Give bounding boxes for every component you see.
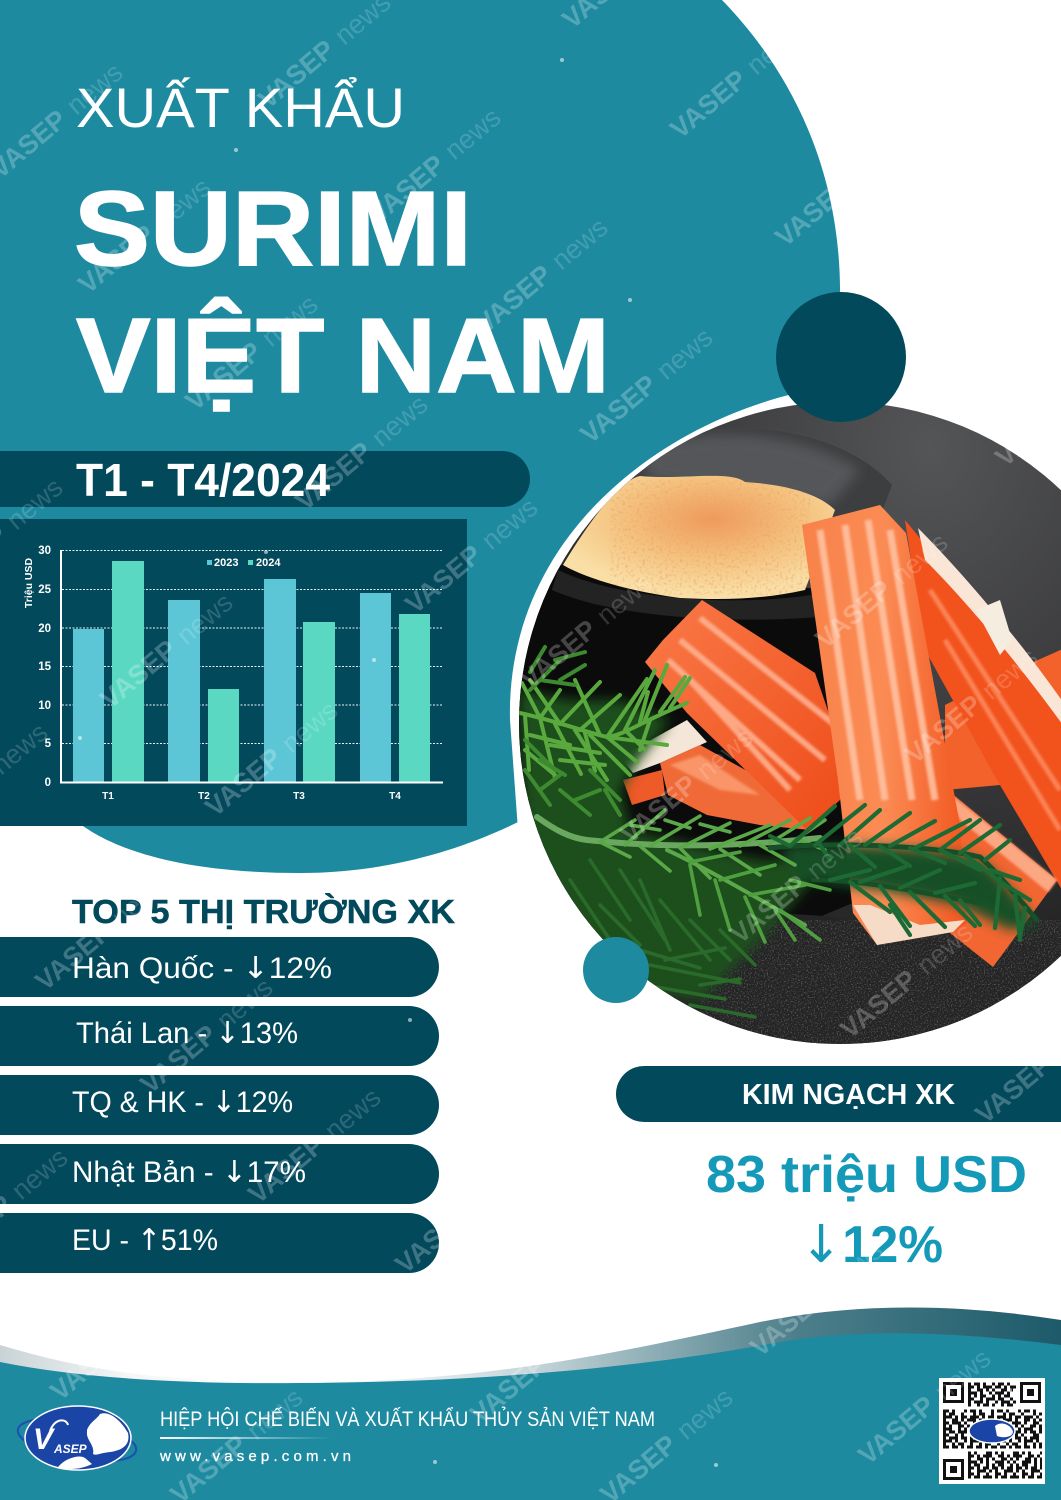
x axis labels: T2 (198, 791, 210, 802)
crab stick: left (645, 600, 845, 830)
axes (61, 550, 443, 782)
crab stick: lower small with pale core (620, 720, 810, 830)
market: EU: EU - ↑51% (72, 1223, 218, 1258)
crab stick: far right (945, 648, 1061, 790)
dill sprig: lower light (537, 810, 830, 942)
crab stick: right (905, 520, 1061, 895)
watermarks: VASEP news: VASEPnews (180, 289, 323, 417)
market: TQ & HK (0, 1075, 439, 1135)
watermarks: VASEP news: VASEPnews (575, 322, 718, 450)
watermarks: VASEP news: VASEPnews (725, 822, 868, 950)
watermarks: VASEP news: VASEPnews (30, 869, 173, 997)
title: việt nam: VIỆT NAM (76, 297, 610, 415)
export value label pill (616, 1066, 1061, 1122)
dill sprig: upper left (520, 647, 690, 815)
footer divider (160, 1437, 332, 1439)
market: Hàn Quốc: Hàn Quốc - ↓12% (72, 951, 332, 986)
market: Nhật Bản (0, 1144, 439, 1204)
footer teal panel (0, 1333, 1061, 1500)
title: surimi: SURIMI (74, 170, 472, 288)
slate grain (700, 920, 1061, 1050)
dill sprig: right dark (770, 805, 1037, 940)
x axis labels: T3 (293, 791, 305, 802)
period pill (0, 451, 530, 507)
export value label pill: KIM NGẠCH XK (742, 1079, 955, 1111)
footer wave band (0, 1308, 1061, 1400)
white ring around photo (510, 382, 1061, 1060)
watermarks: VASEP news: VASEPnews (290, 389, 433, 517)
watermarks: VASEP news: VASEPnews (615, 722, 758, 850)
watermarks: VASEP news: VASEPnews (390, 1152, 533, 1280)
QR finder patterns (944, 1384, 1040, 1478)
bar chart: monthly export value (0, 519, 467, 826)
watermarks: VASEP news: VASEPnews (770, 125, 913, 253)
watermarks: VASEP news: VASEPnews (73, 172, 216, 300)
slate background (510, 395, 1061, 1055)
watermarks: VASEP news: VASEPnews (470, 212, 613, 340)
photo: surimi crab sticks with dill (510, 395, 1061, 1060)
period pill: T1 - T4/2024 (76, 454, 330, 506)
market: TQ & HK: TQ & HK - ↓12% (72, 1085, 293, 1120)
y axis labels: 15 (38, 661, 52, 673)
decorative circle: teal (583, 937, 649, 1003)
watermarks: VASEP news: VASEPnews (900, 642, 1043, 770)
watermarks: VASEP news: VASEPnews (243, 1082, 386, 1210)
market: Hàn Quốc (0, 937, 439, 997)
market: Nhật Bản: Nhật Bản - ↓17% (72, 1155, 306, 1190)
logo: VASEP: V (33, 1423, 56, 1456)
watermarks: VASEP news: VASEPnews (135, 972, 278, 1100)
watermarks: VASEP news: VASEPnews (515, 567, 658, 695)
heading: top 5 markets: TOP 5 THỊ TRƯỜNG XK (72, 893, 455, 930)
watermarks: VASEP news: VASEPnews (95, 587, 238, 715)
y axis labels: 10 (38, 700, 51, 712)
dill foliage base (518, 690, 1037, 1000)
y axis labels (38, 545, 52, 789)
logo: VASEP (15, 1406, 139, 1470)
bars 2023 (73, 579, 391, 782)
bars 2024 (112, 561, 430, 782)
watermarks: VASEP news: VASEPnews (835, 917, 978, 1045)
export value figure: 83 triệu USD (706, 1146, 1027, 1204)
market: Thái Lan (0, 1006, 439, 1066)
y axis title: Triệu USD (23, 557, 35, 608)
x axis labels: T4 (389, 791, 401, 802)
export change figure: ↓12% (800, 1215, 943, 1275)
title: xuất khẩu: XUẤT KHẨU (76, 76, 405, 139)
x axis labels (102, 791, 401, 802)
y axis labels: 30 (38, 545, 51, 557)
watermarks: VASEP news: VASEPnews (45, 1279, 188, 1407)
market list (0, 937, 439, 1273)
gridlines (62, 550, 443, 744)
dill sprig: lower dark (560, 860, 755, 1017)
crab stick: centre (802, 505, 967, 945)
decorative circle: dark (776, 292, 906, 422)
footer website: www.vasep.com.vn (159, 1448, 351, 1465)
y axis labels: 5 (45, 738, 52, 750)
bowl with sauce (552, 428, 892, 620)
y axis labels: 0 (45, 777, 51, 789)
legend: 2023 (214, 557, 238, 569)
crab stick: lower diagonal (950, 795, 1058, 967)
QR code (939, 1378, 1045, 1484)
watermarks: VASEP news: VASEPnews (200, 695, 343, 823)
watermarks: VASEP news: VASEPnews (810, 527, 953, 655)
black bowl shadow (519, 564, 852, 986)
watermarks: VASEP news: VASEPnews (465, 1302, 608, 1430)
watermarks: VASEP news: VASEPnews (363, 102, 506, 230)
watermarks: VASEP news: VASEPnews (665, 17, 808, 145)
QR centre logo (969, 1419, 1015, 1443)
lower slate (648, 914, 1061, 1044)
y axis labels: 25 (38, 584, 52, 596)
panel: teal header blob (0, 0, 840, 873)
x axis labels: T1 (102, 791, 114, 802)
footer organisation name: HIỆP HỘI CHẾ BIẾN VÀ XUẤT KHẨU THỦY SẢN VIỆT NAM (160, 1407, 655, 1431)
y axis labels: 20 (38, 623, 51, 635)
legend: 2024 (256, 557, 281, 569)
logo: VASEP: ASEP (53, 1442, 88, 1456)
watermarks: VASEP news: VASEPnews (400, 492, 543, 620)
legend (207, 557, 281, 569)
market: Thái Lan: Thái Lan - ↓13% (76, 1016, 298, 1051)
watermarks: VASEP news: VASEPnews (853, 1343, 996, 1471)
watermarks: VASEP news: VASEPnews (745, 1235, 888, 1363)
market: EU (0, 1213, 439, 1273)
